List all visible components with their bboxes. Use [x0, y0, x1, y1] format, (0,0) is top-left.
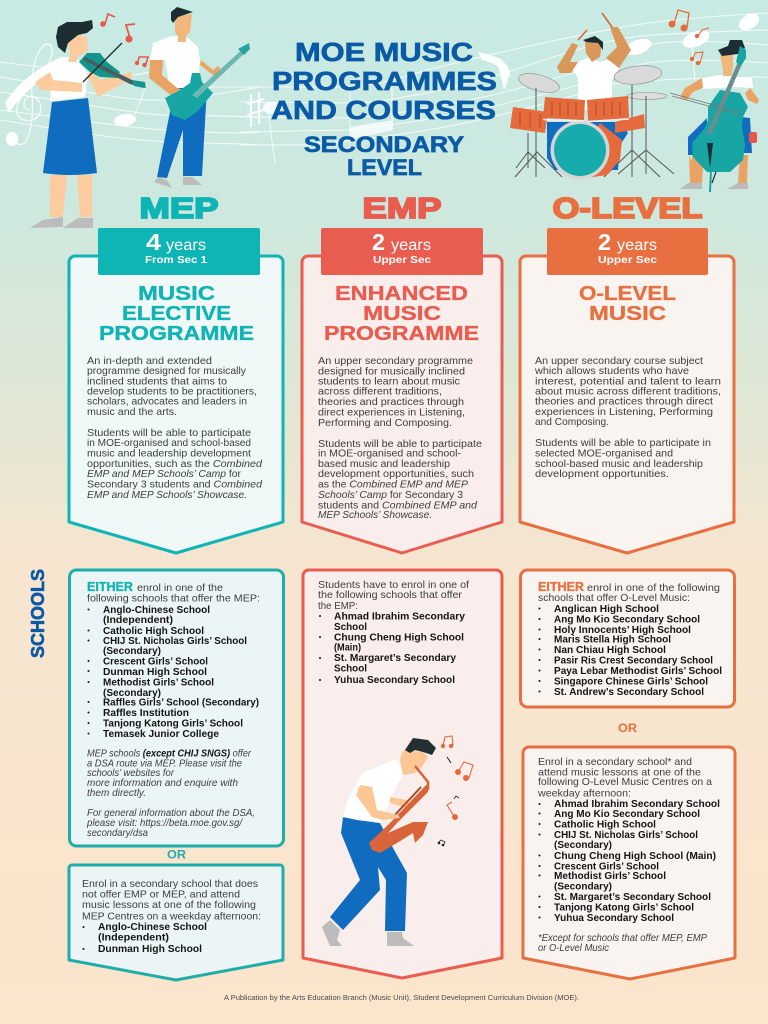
O-Level description text: An upper secondary course subject: [535, 356, 703, 367]
treble clef: [14, 44, 52, 145]
EMP description text: Schools’ Camp for Secondary 3: [318, 490, 463, 501]
O-Level centre list: (Secondary): [554, 840, 612, 851]
O-Level centre list: Crescent Girls’ School: [554, 862, 659, 872]
O-Level centre list: Methodist Girls’ School: [554, 871, 666, 882]
panel: O-Level schools: schools that offer O-Level Music:: [538, 593, 690, 604]
MEP description text: scholars, advocates and leaders in: [87, 396, 247, 408]
O-Level duration tab: Upper Sec: [598, 254, 657, 266]
MEP school list: (Secondary): [103, 646, 161, 657]
MEP school list: Raffles Institution: [103, 708, 189, 719]
O-Level school list: Maris Stella High School: [554, 634, 671, 646]
EMP school list: Chung Cheng High School: [334, 632, 464, 644]
DSA note: MEP schools (except CHIJ SNGS) offer: [87, 748, 252, 760]
panel: O-Level schools: [520, 570, 734, 707]
EMP description text: An upper secondary programme: [318, 356, 473, 367]
O-Level description text: interest, potential and talent to learn: [535, 376, 721, 388]
panel: MEP schools: enrol in one of the: [137, 583, 223, 594]
EMP description text: students to learn about music: [318, 376, 460, 388]
MEP duration tab: [98, 228, 260, 275]
MEP programme title: ELECTIVE: [122, 303, 231, 325]
O-Level centre list: Catholic High School: [554, 820, 656, 830]
O-Level centre list: Yuhua Secondary School: [554, 913, 674, 924]
title: [271, 37, 497, 180]
MEP description text: music and leadership development: [87, 448, 251, 460]
DSA note: For general information about the DSA,: [87, 808, 255, 819]
panel: MEP centres: Dunman High School: [98, 944, 202, 955]
EMP description text: development opportunities, such: [318, 469, 474, 480]
footnote: or O-Level Music: [538, 943, 609, 954]
MEP school list: Crescent Girls’ School: [103, 656, 208, 668]
O-Level description text: school-based music and leadership: [535, 459, 703, 470]
EMP description text: based music and leadership: [318, 459, 450, 470]
EMP description text: theories and practices through: [318, 397, 464, 408]
O-Level description text: development opportunities.: [535, 469, 669, 480]
O-Level duration tab: years: [617, 237, 657, 254]
title: AND COURSES: [271, 95, 496, 125]
MEP programme title: MUSIC: [138, 283, 215, 305]
heading: EMP: EMP: [362, 193, 442, 225]
panel: EMP schools: the EMP:: [318, 601, 358, 612]
DSA note: more information and enquire with: [87, 778, 238, 789]
panel: MEP centres: music lessons at one of the following: [82, 900, 256, 911]
DSA note: secondary/dsa: [87, 828, 148, 839]
EMP duration tab: Upper Sec: [373, 254, 431, 266]
EMP programme title: ENHANCED: [335, 283, 468, 305]
O-Level school list: Holy Innocents’ High School: [554, 625, 691, 636]
O-Level description text: theories and practices through direct: [535, 396, 713, 408]
EMP duration tab: years: [391, 237, 431, 254]
O-Level centre list: Chung Cheng High School (Main): [554, 851, 716, 862]
MEP school list: Methodist Girls’ School: [103, 678, 214, 688]
O-Level programme title: O-LEVEL: [579, 283, 676, 305]
O-Level centre list: Tanjong Katong Girls’ School: [554, 902, 694, 914]
O-Level programme title: MUSIC: [589, 303, 666, 325]
EMP description text: across different traditions,: [318, 387, 442, 398]
MEP school list: (Independent): [103, 615, 173, 626]
O-Level duration tab: 2: [598, 229, 611, 255]
O-Level centre list: Ang Mo Kio Secondary School: [554, 809, 700, 820]
MEP duration tab: 4: [146, 229, 161, 255]
EMP programme title: MUSIC: [363, 303, 441, 325]
MEP duration tab: From Sec 1: [145, 254, 207, 266]
EMP school list: St. Margaret’s Secondary: [334, 653, 456, 664]
panel: O-Level centres: following O-Level Music Centres on a: [538, 777, 712, 788]
illustration: cellist: [668, 10, 759, 192]
O-Level school list: Singapore Chinese Girls’ School: [554, 676, 708, 688]
EMP description text: designed for musically inclined: [318, 366, 465, 377]
O-Level programme title: [579, 283, 676, 325]
MEP description text: Students will be able to participate: [87, 428, 251, 439]
side label: SCHOOLS: SCHOOLS: [28, 569, 48, 658]
MEP programme title: [99, 283, 254, 345]
panel: MEP schools: following schools that offer the MEP:: [87, 594, 260, 604]
MEP description text: Secondary 3 students and Combined: [87, 480, 262, 490]
EMP programme title: [324, 283, 479, 345]
MEP school list: Temasek Junior College: [103, 729, 219, 740]
panel: MEP centres: Enrol in a secondary school that does: [82, 879, 258, 890]
panel: O-Level schools: enrol in one of the following: [587, 583, 720, 594]
DSA note: them directly.: [87, 788, 146, 799]
EMP description text: in MOE-organised and school-: [318, 448, 461, 460]
panel: EMP schools: the following schools that offer: [318, 590, 463, 601]
MEP description text: in MOE-organised and school-based: [87, 438, 251, 449]
O-Level description text: experiences in Listening, Performing: [535, 407, 713, 418]
panel: MEP schools: EITHER: [87, 580, 133, 594]
O-Level centre list: [538, 799, 720, 924]
panel: MEP centres: MEP Centres on a weekday afternoon:: [82, 912, 261, 922]
EMP description text: [318, 356, 482, 521]
EMP description text: direct experiences in Listening,: [318, 408, 465, 418]
O-Level description text: about music across different traditions,: [535, 386, 721, 398]
O-Level description text: and Composing.: [535, 417, 609, 428]
panel: MEP schools: [70, 570, 284, 846]
EMP description text: as the Combined EMP and MEP: [318, 480, 468, 490]
O-Level school list: [538, 604, 722, 698]
MEP programme title: PROGRAMME: [99, 323, 254, 345]
panel: MEP description: [69, 228, 283, 553]
MEP description text: inclined students that aims to: [87, 376, 227, 388]
O-Level school list: St. Andrew’s Secondary School: [554, 687, 704, 698]
MEP description text: programme designed for musically: [87, 366, 247, 377]
DSA note: a DSA route via MEP. Please visit the: [87, 758, 242, 770]
O-Level duration tab: [547, 228, 708, 275]
MEP description text: develop students to be practitioners,: [87, 386, 257, 398]
MEP school list: Dunman High School: [103, 667, 207, 678]
panel: MEP centres: (Independent): [98, 932, 169, 944]
treble clef sweep: [5, 56, 64, 113]
O-Level description text: Students will be able to participate in: [535, 438, 711, 449]
panel: O-Level centres: Enrol in a secondary school* and: [538, 757, 692, 768]
illustration: saxophone player: [322, 736, 473, 946]
label: OR (O-Level): OR: [618, 723, 638, 735]
O-Level centre list: Ahmad Ibrahim Secondary School: [554, 799, 720, 810]
MEP school list: Catholic High School: [103, 626, 204, 637]
panel: O-Level centres: weekday afternoon:: [537, 788, 631, 800]
MEP school list: CHIJ St. Nicholas Girls’ School: [103, 636, 247, 647]
O-Level centre list: (Secondary): [554, 882, 612, 892]
EMP school list: [319, 612, 465, 686]
white notes: [6, 10, 762, 146]
footer credit: A Publication by the Arts Education Branch (Music Unit), Student Development Curriculum Division (MOE).: [224, 995, 579, 1002]
MEP description text: EMP and MEP Schools’ Showcase.: [87, 490, 247, 501]
panel: O-Level schools: EITHER: [538, 580, 584, 594]
O-Level school list: Paya Lebar Methodist Girls’ School: [554, 666, 722, 677]
EMP description text: MEP Schools’ Showcase.: [318, 510, 432, 521]
O-Level centre list: St. Margaret’s Secondary School: [554, 892, 711, 903]
title: PROGRAMMES: [272, 66, 497, 96]
O-Level description text: selected MOE-organised and: [535, 448, 673, 460]
MEP description text: EMP and MEP Schools’ Camp for: [87, 469, 242, 480]
O-Level school list: Nan Chiau High School: [554, 645, 666, 656]
EMP school list: School: [334, 664, 367, 674]
EMP duration tab: [321, 228, 483, 275]
panel: O-Level centres: [523, 747, 735, 979]
panel: EMP schools: [303, 570, 502, 978]
title: LEVEL: [347, 155, 422, 180]
MEP duration tab: years: [166, 237, 206, 254]
EMP description text: Performing and Composing.: [318, 418, 452, 429]
MEP description text: [87, 356, 262, 501]
O-Level school list: Ang Mo Kio Secondary School: [554, 614, 700, 626]
title: SECONDARY: [304, 132, 464, 157]
O-Level description text: [534, 356, 721, 480]
DSA note: [86, 748, 255, 839]
MEP school list: [88, 605, 259, 740]
title: MOE MUSIC: [295, 37, 473, 67]
panel: O-Level description: [520, 228, 734, 553]
O-Level description text: which allows students who have: [534, 366, 689, 377]
panel: EMP description: [302, 228, 502, 553]
EMP school list: School: [334, 622, 367, 633]
DSA note: please visit: https://beta.moe.gov.sg/: [86, 818, 243, 829]
panel: EMP schools: Students have to enrol in one of: [318, 580, 469, 591]
illustration: boy playing guitar: [149, 7, 250, 188]
panel: MEP centres: [69, 865, 283, 980]
O-Level school list: Pasir Ris Crest Secondary School: [554, 656, 713, 666]
MEP school list: (Secondary): [103, 688, 161, 699]
MEP school list: Anglo-Chinese School: [103, 605, 210, 616]
O-Level centre list: CHIJ St. Nicholas Girls’ School: [554, 830, 698, 841]
footnote: [538, 933, 707, 954]
panel: O-Level centres: attend music lessons at one of the: [538, 768, 701, 778]
EMP school list: Yuhua Secondary School: [334, 675, 455, 686]
panel: MEP centres: Anglo-Chinese School: [98, 922, 207, 933]
O-Level school list: Anglican High School: [554, 604, 659, 615]
EMP school list: (Main): [334, 642, 361, 654]
MEP school list: Raffles Girls’ School (Secondary): [103, 698, 259, 708]
EMP duration tab: 2: [372, 229, 385, 255]
EMP description text: Students will be able to participate: [318, 439, 482, 450]
EMP school list: Ahmad Ibrahim Secondary: [334, 612, 465, 622]
MEP description text: music and the arts.: [87, 407, 177, 418]
DSA note: schools’ websites for: [87, 768, 175, 779]
label: OR (MEP): OR: [167, 850, 187, 862]
heading: MEP: MEP: [140, 193, 218, 225]
EMP programme title: PROGRAMME: [324, 323, 479, 345]
MEP description text: An in-depth and extended: [87, 356, 212, 367]
illustration: girl playing violin: [30, 14, 148, 228]
footnote: *Except for schools that offer MEP, EMP: [538, 933, 707, 944]
panel: MEP centres: not offer EMP or MEP, and attend: [82, 890, 240, 900]
EMP description text: students and Combined EMP and: [318, 500, 477, 512]
MEP school list: Tanjong Katong Girls’ School: [103, 718, 243, 730]
illustration: drummer: [510, 13, 674, 180]
background music staves: [0, 10, 768, 163]
MEP description text: opportunities, such as the Combined: [87, 459, 262, 470]
heading: O-LEVEL: O-LEVEL: [552, 193, 702, 225]
